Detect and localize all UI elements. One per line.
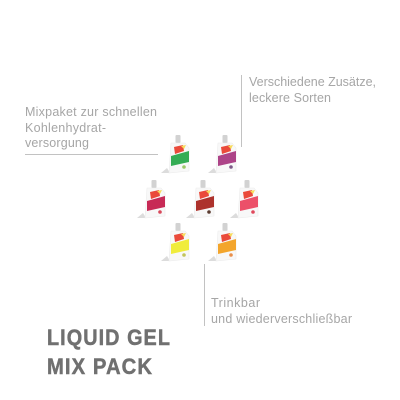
text block: mix pack description: Kohlenhydrat-: [25, 121, 106, 135]
title: LIQUID GEL: [47, 325, 171, 350]
icon: dark red gel pouch: [186, 180, 214, 218]
icon: yellow gel pouch: [161, 223, 189, 261]
icon: orange gel pouch: [208, 223, 236, 261]
title: MIX PACK: [47, 354, 153, 379]
title: [47, 325, 171, 379]
icon: purple gel pouch: [208, 135, 236, 173]
callout line: resealable description: [204, 264, 205, 326]
text block: mix pack description: versorgung: [25, 136, 89, 150]
text block: mix pack description: [25, 105, 157, 150]
icon: crimson gel pouch: [137, 180, 165, 218]
text block: mix pack description: Mixpaket zur schnellen: [25, 105, 157, 119]
text block: flavours description: [249, 75, 376, 105]
text block: resealable description: Trinkbar: [211, 296, 260, 310]
icon: pink gel pouch: [230, 180, 258, 218]
text block: flavours description: leckere Sorten: [249, 91, 331, 105]
icon: green gel pouch: [161, 135, 189, 173]
callout line: flavours description: [241, 75, 242, 147]
text block: resealable description: und wiederverschließbar: [211, 312, 352, 326]
text block: resealable description: [211, 296, 352, 326]
callout line: mix pack description: [25, 154, 158, 155]
text block: flavours description: Verschiedene Zusätze,: [249, 75, 376, 89]
